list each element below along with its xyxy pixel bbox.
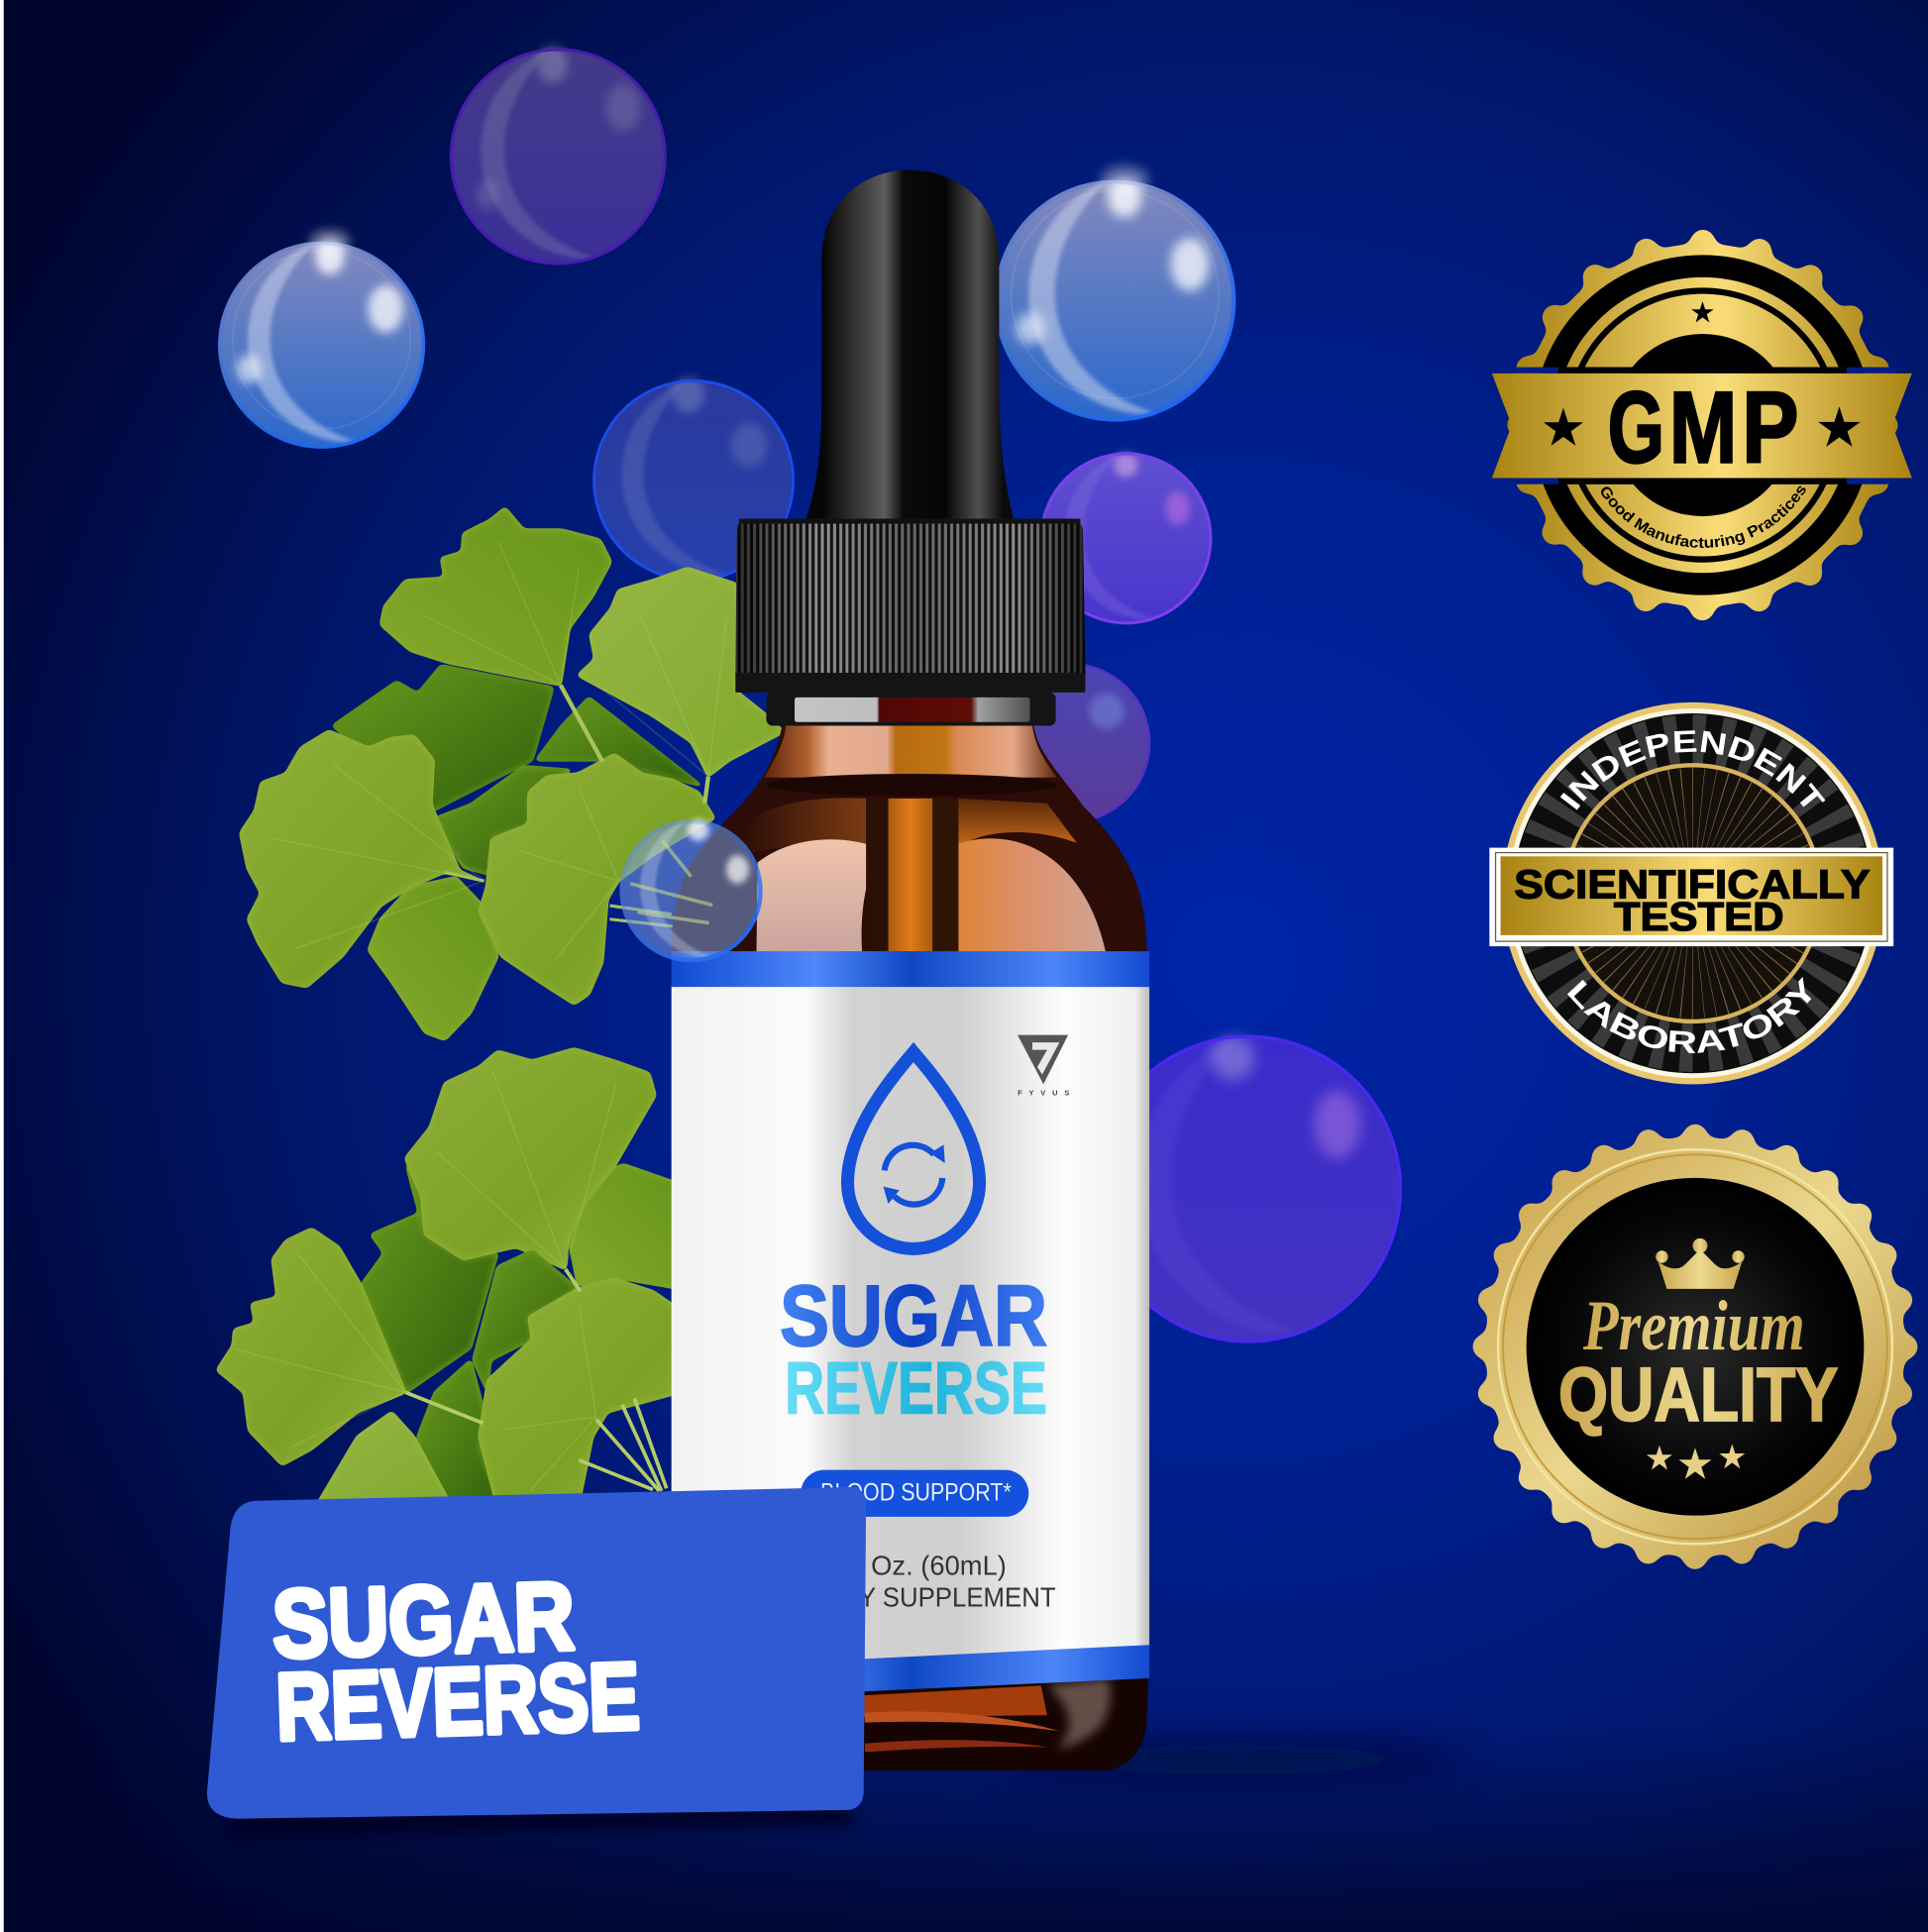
leaf: middle dark	[473, 1250, 578, 1392]
leaf veins: upper	[271, 542, 727, 961]
label type: DIETARY SUPPLEMENT	[768, 1582, 1056, 1613]
leaf: big left	[217, 1229, 405, 1465]
ginkgo leaves: upper cluster	[240, 507, 784, 1040]
premium scalloped edge	[1484, 1136, 1906, 1557]
badge: GMP	[1492, 230, 1912, 620]
leaf: dark back	[333, 666, 553, 810]
label top stripe	[672, 951, 1149, 987]
leaf: back upper middle	[536, 698, 702, 786]
pill: blood support: BLOOD SUPPORT*	[820, 1479, 1012, 1507]
leaf: under left	[369, 877, 497, 1040]
GMP scalloped edge	[1519, 242, 1886, 608]
crown	[1656, 1238, 1745, 1289]
dropper bulb	[805, 170, 1014, 520]
stems: upper cluster	[445, 685, 708, 926]
GMP text: M	[1669, 371, 1737, 483]
shoulder dark ring	[766, 774, 1057, 796]
leaf: top	[380, 507, 611, 685]
brand logo: fyvus	[1018, 1035, 1069, 1098]
pill: blood support	[801, 1470, 1028, 1517]
ribbon	[1489, 848, 1893, 946]
bubble: upper right blue	[994, 165, 1235, 421]
bubble: front over leaf and bottle	[619, 819, 763, 962]
label white	[672, 986, 1149, 1668]
shoulder brown left	[739, 798, 866, 856]
badge: premium quality	[1484, 1136, 1906, 1557]
bottom background fade	[0, 1725, 1928, 1932]
label bottom stripe	[672, 1645, 1149, 1700]
card shadow	[228, 1801, 852, 1836]
leaf: lower right	[480, 1279, 680, 1509]
leaf: bottom small	[418, 1360, 505, 1509]
brand logo: fyvus: FYVUS	[1018, 1089, 1069, 1098]
curved text: independent: INDEPENDENT	[1559, 730, 1825, 810]
leaf: dark back left	[361, 1162, 497, 1392]
leaf: big left	[240, 730, 484, 987]
stems: lower cluster	[405, 1269, 667, 1491]
badge: scientifically tested	[1489, 701, 1894, 1084]
leaf: bottom left	[314, 1412, 454, 1509]
neck collar	[766, 693, 1056, 725]
premium text: Premium	[1582, 1286, 1805, 1365]
bottle base glass	[672, 1651, 1149, 1771]
bubble: large lower right purple	[1094, 1035, 1402, 1343]
GMP stars	[1544, 301, 1861, 447]
GMP text: P	[1742, 371, 1798, 483]
ginkgo leaves: lower cluster	[217, 1048, 680, 1509]
GMP curved text: Good Manufacturing Practices	[1601, 485, 1806, 548]
card title: reverse: REVERSE	[274, 1644, 641, 1761]
icon: water drop with cycle arrows	[847, 1052, 980, 1248]
leaf: top right	[578, 568, 784, 776]
leaf veins: lower	[234, 1072, 616, 1491]
GMP text: G	[1608, 371, 1664, 483]
GMP text	[1608, 371, 1798, 483]
card title: sugar: SUGAR	[271, 1561, 576, 1678]
bubble: top purple	[450, 46, 667, 265]
bottle	[672, 170, 1149, 1771]
leaf: right mid	[480, 754, 714, 1005]
leaf: right back	[569, 1164, 680, 1289]
bottle floor shadow	[998, 1742, 1466, 1776]
bubble: left blue	[218, 229, 425, 449]
premium stars	[1647, 1445, 1745, 1479]
label volume: 2 Fl. Oz. (60mL)	[810, 1550, 1007, 1580]
center liquid column	[866, 799, 958, 955]
bubble: right vivid purple	[1039, 452, 1213, 625]
ribbon: SCIENTIFICALLY	[1514, 862, 1871, 908]
right glass upper brown	[957, 799, 1077, 848]
amber glass body	[672, 724, 1147, 955]
right glass highlight	[957, 838, 1107, 955]
curved text: laboratory: LABORATORY	[1567, 977, 1811, 1054]
upper shoulder amber	[764, 725, 1057, 778]
leaf: top large	[405, 1048, 656, 1269]
left edge strip	[0, 0, 4, 1932]
blue name card	[207, 1487, 866, 1819]
left glass highlight	[756, 839, 879, 955]
label title: reverse: REVERSE	[785, 1345, 1047, 1429]
label title: sugar: SUGAR	[780, 1268, 1047, 1364]
bubble: behind bottle neck	[991, 663, 1150, 823]
ribbon: TESTED	[1614, 894, 1784, 939]
bubble: faint blue	[592, 376, 795, 582]
quality text: QUALITY	[1558, 1352, 1838, 1438]
ribbed cap	[735, 519, 1085, 693]
leaf: mid dark	[435, 767, 572, 875]
